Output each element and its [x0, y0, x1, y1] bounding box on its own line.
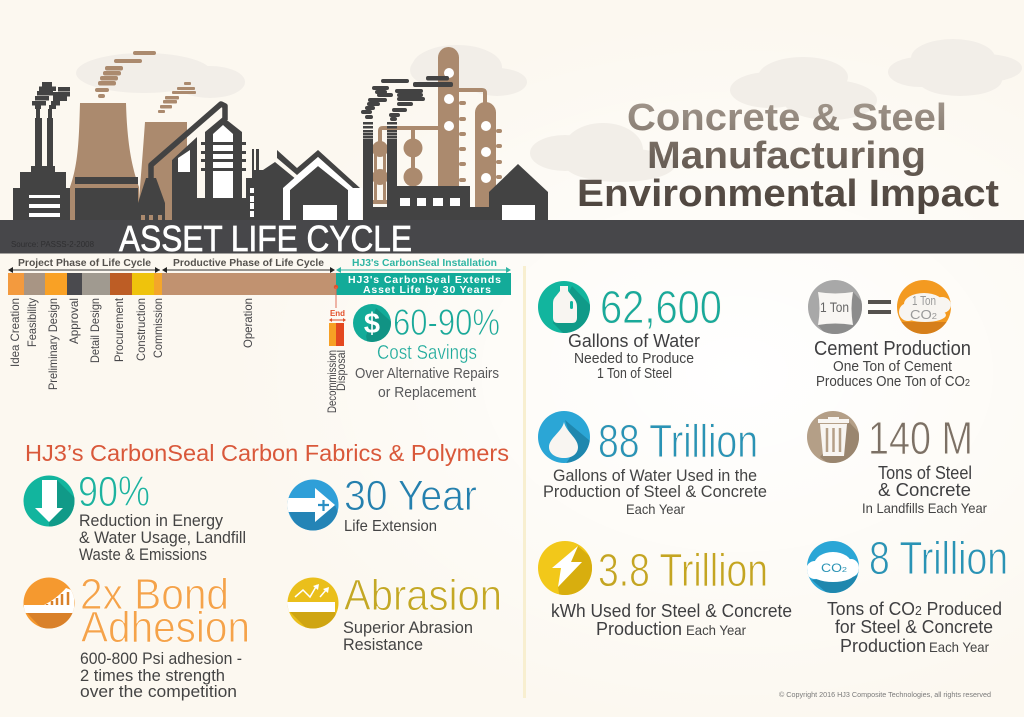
icon: trash can: [807, 411, 859, 463]
icon: co2 cloud: [897, 280, 951, 334]
stat: 140 M landfill: & Concrete: [878, 480, 971, 500]
phase headings: HJ3's CarbonSeal Installation: [352, 257, 497, 269]
icon: down arrow: [24, 476, 74, 526]
stat: abrasion: Superior Abrasion: [343, 619, 473, 637]
stat: 30 year: Life Extension: [344, 518, 437, 535]
dark header band: [0, 220, 1024, 254]
stat: cement production: One Ton of Cement: [833, 359, 952, 375]
icon: water drop: [538, 411, 590, 463]
stat: cost savings: [353, 302, 500, 401]
stat: cost savings: Cost Savings: [377, 342, 477, 364]
stage labels: Preliminary Design: [46, 298, 60, 390]
title: Environmental Impact: [577, 173, 999, 215]
clouds: [76, 39, 1022, 182]
furnace rings: [201, 142, 246, 171]
stat: 3.8 trillion kwh: Production: [596, 619, 682, 639]
icon: dollar: $: [364, 308, 380, 340]
title: Concrete & Steel: [627, 97, 947, 139]
heading: carbon fabrics: HJ3’s CarbonSeal Carbon Fabrics & Polymers: [25, 440, 509, 466]
stat: 30 year: [288, 480, 476, 531]
extension banner: HJ3's CarbonSeal Extends: [348, 274, 501, 286]
dark buildings: [13, 76, 548, 220]
stat: 3.8 trillion kwh: [538, 541, 792, 639]
icon: equals: [868, 300, 891, 314]
icon: jug: [538, 281, 590, 333]
stat: bond adhesion: Adhesion: [81, 603, 250, 652]
icon: lightning bolt: [538, 541, 592, 595]
icon: plus arrow: [288, 480, 338, 530]
stat: 30 year: 30 Year: [344, 472, 477, 520]
section title: asset life cycle: ASSET LIFE CYCLE: [119, 218, 412, 259]
icon: abrasion: [287, 578, 340, 632]
stat: 62,600 gallons: 1 Ton of Steel: [597, 366, 672, 382]
stat: cost savings: or Replacement: [378, 385, 476, 401]
stage labels: Approval: [67, 298, 81, 344]
stat: bond adhesion: 2 times the strength: [80, 667, 225, 685]
stat: 8 trillion co2: for Steel & Concrete: [835, 617, 993, 637]
stat: 90%: & Water Usage, Landfill: [79, 529, 246, 547]
stat: 3.8 trillion kwh: 3.8 Trillion: [598, 544, 768, 596]
stat: cost savings: 60-90%: [393, 302, 500, 343]
stat: bond adhesion: over the competition: [80, 683, 237, 701]
stat: bond adhesion: 600-800 Psi adhesion -: [80, 650, 242, 668]
stat: 90%: 90%: [78, 468, 150, 516]
stage labels: Decommission: [325, 350, 339, 413]
title: Manufacturing: [647, 135, 926, 177]
cooling towers: [70, 103, 187, 230]
timeline: asset life cycle: [8, 257, 511, 413]
tan smoke: [95, 51, 196, 113]
panel divider: [523, 266, 526, 698]
stat: 140 M landfill: [807, 411, 987, 516]
illustration: factory skyline: [13, 47, 548, 230]
stage labels: Operation: [241, 298, 255, 348]
icon: bond: [24, 578, 74, 628]
stat: 90%: [24, 476, 245, 560]
stat: cement production: Produces One Ton of CO2: [816, 374, 970, 390]
icon: cement bag: 1 Ton: [820, 299, 849, 315]
stat: 8 trillion co2: Tons of CO2 Produced: [827, 599, 1002, 619]
stat: abrasion: Abrasion: [344, 571, 502, 620]
stage labels: [8, 297, 348, 413]
stat: 88 trillion: Production of Steel & Concrete: [543, 482, 767, 501]
title: [577, 97, 999, 215]
stage labels: Detail Design: [88, 298, 102, 363]
stat: 140 M landfill: In Landfills Each Year: [862, 500, 987, 516]
icon: co2 cloud: CO 2: [910, 308, 938, 322]
icon: co2 cloud: [807, 541, 859, 593]
phase arrows: [8, 267, 511, 273]
stat: 90%: Reduction in Energy: [79, 512, 224, 530]
stat: abrasion: Resistance: [343, 636, 423, 654]
stat: 140 M landfill: 140 M: [868, 412, 973, 464]
stat: 88 trillion: [538, 411, 767, 517]
icon: co2 cloud: 1 Ton: [912, 294, 936, 308]
stat: 3.8 trillion kwh: Each Year: [686, 622, 746, 638]
stat: 88 trillion: 88 Trillion: [598, 415, 758, 467]
phase headings: Productive Phase of Life Cycle: [173, 257, 324, 269]
stat: cement production: Cement Production: [814, 338, 971, 360]
stat: 88 trillion: Gallons of Water Used in the: [553, 466, 757, 485]
stage labels: Procurement: [112, 297, 126, 362]
stage labels: Commission: [151, 298, 165, 358]
phase bar: [8, 273, 336, 295]
stat: bond adhesion: [24, 570, 250, 701]
refinery columns: [372, 47, 502, 209]
stat: 62,600 gallons: Gallons of Water: [568, 331, 700, 351]
stat: 62,600 gallons: [538, 281, 722, 382]
white windows: [29, 125, 535, 227]
source note: Source: PASSS-2-2008: [11, 240, 95, 249]
stat: 88 trillion: Each Year: [626, 501, 685, 517]
icon: dollar: [353, 304, 391, 342]
stat: 62,600 gallons: 62,600: [600, 281, 722, 333]
stage labels: Construction: [134, 298, 148, 361]
extension banner: [336, 273, 511, 296]
copyright: © Copyright 2016 HJ3 Composite Technologies, all rights reserved: [779, 691, 991, 699]
icon: co2 cloud: CO 2: [821, 563, 847, 575]
stat: 3.8 trillion kwh: kWh Used for Steel & Concrete: [551, 601, 792, 621]
stat: 90%: Waste & Emissions: [79, 546, 207, 564]
blast furnace: [151, 104, 225, 178]
right stacks: [363, 139, 373, 214]
stat: 8 trillion co2: Production: [840, 636, 926, 656]
stat: bond adhesion: 2x Bond: [80, 570, 229, 619]
extension banner: Asset Life by 30 Years: [363, 284, 491, 296]
stat: 8 trillion co2: Each Year: [929, 639, 989, 655]
phase headings: [18, 257, 497, 269]
icon: cement bag: [808, 280, 862, 334]
end marker: End: [330, 308, 345, 318]
stage labels: Idea Creation: [8, 298, 22, 367]
stat: 8 trillion co2: [807, 541, 1006, 652]
end marker: [329, 285, 346, 346]
stat: 62,600 gallons: Needed to Produce: [574, 351, 694, 367]
stat: cost savings: Over Alternative Repairs: [355, 366, 499, 382]
stage labels: Feasibility: [25, 298, 39, 347]
phase headings: Project Phase of Life Cycle: [18, 257, 151, 269]
stage labels: Disposal: [334, 350, 348, 391]
stat: 140 M landfill: Tons of Steel: [878, 463, 972, 483]
stat: cement production: [808, 280, 971, 390]
stat: abrasion: [288, 578, 499, 650]
